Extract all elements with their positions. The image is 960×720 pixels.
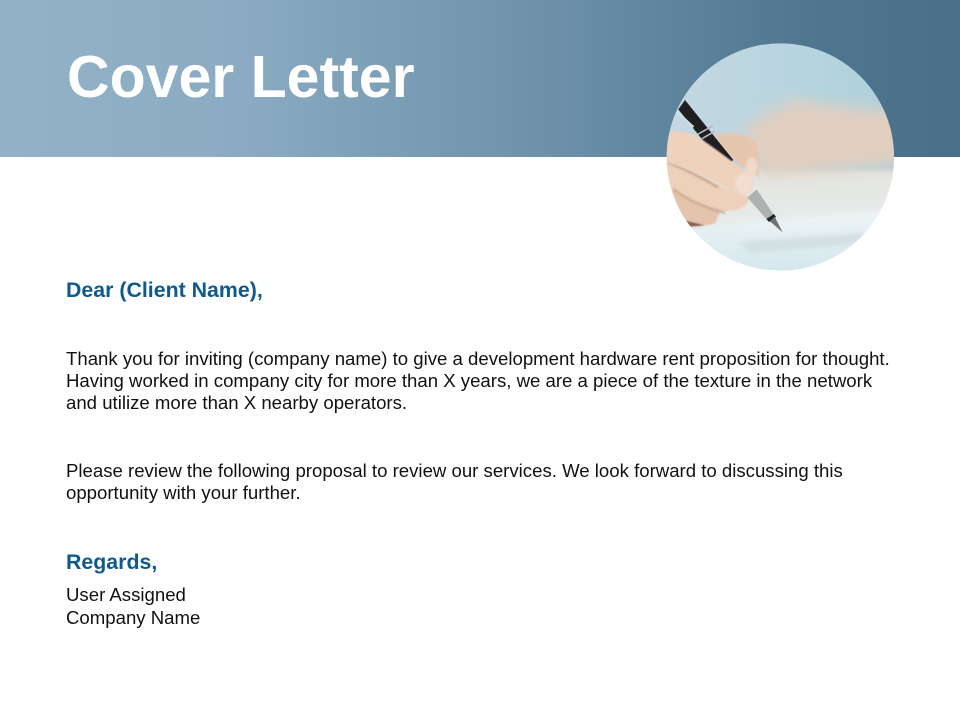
paragraph two xyxy=(66,460,843,503)
front hand xyxy=(665,133,759,227)
signature xyxy=(66,584,200,628)
index finger over pen xyxy=(663,132,753,194)
paragraph one: Thank you for inviting (company name) to give a development hardware rent proposition for thought. xyxy=(66,348,890,369)
middle finger xyxy=(665,162,750,211)
greeting: Dear (Client Name), xyxy=(66,278,263,302)
paper xyxy=(699,212,880,271)
paragraph two: Please review the following proposal to review our services. We look forward to discussing this xyxy=(66,460,843,481)
title: Cover Letter xyxy=(67,44,415,110)
header banner xyxy=(0,0,960,157)
signature: Company Name xyxy=(66,607,200,628)
paragraph two: opportunity with your further. xyxy=(66,482,301,503)
paragraph one: and utilize more than X nearby operators. xyxy=(66,392,407,413)
pen section and nib xyxy=(747,189,774,220)
sign-off heading: Regards, xyxy=(66,550,157,574)
paragraph one: Having worked in company city for more than X years, we are a piece of the texture in the network xyxy=(66,370,872,391)
blurred background xyxy=(666,43,894,180)
background hand xyxy=(742,100,903,177)
ring finger xyxy=(670,187,720,225)
thumb xyxy=(715,133,759,177)
pen barrel xyxy=(678,100,733,167)
paper text lines xyxy=(740,233,863,253)
photo: hand writing with a fountain pen xyxy=(666,43,894,271)
signature: User Assigned xyxy=(66,584,186,605)
paragraph one xyxy=(66,348,890,413)
desk xyxy=(675,168,893,232)
